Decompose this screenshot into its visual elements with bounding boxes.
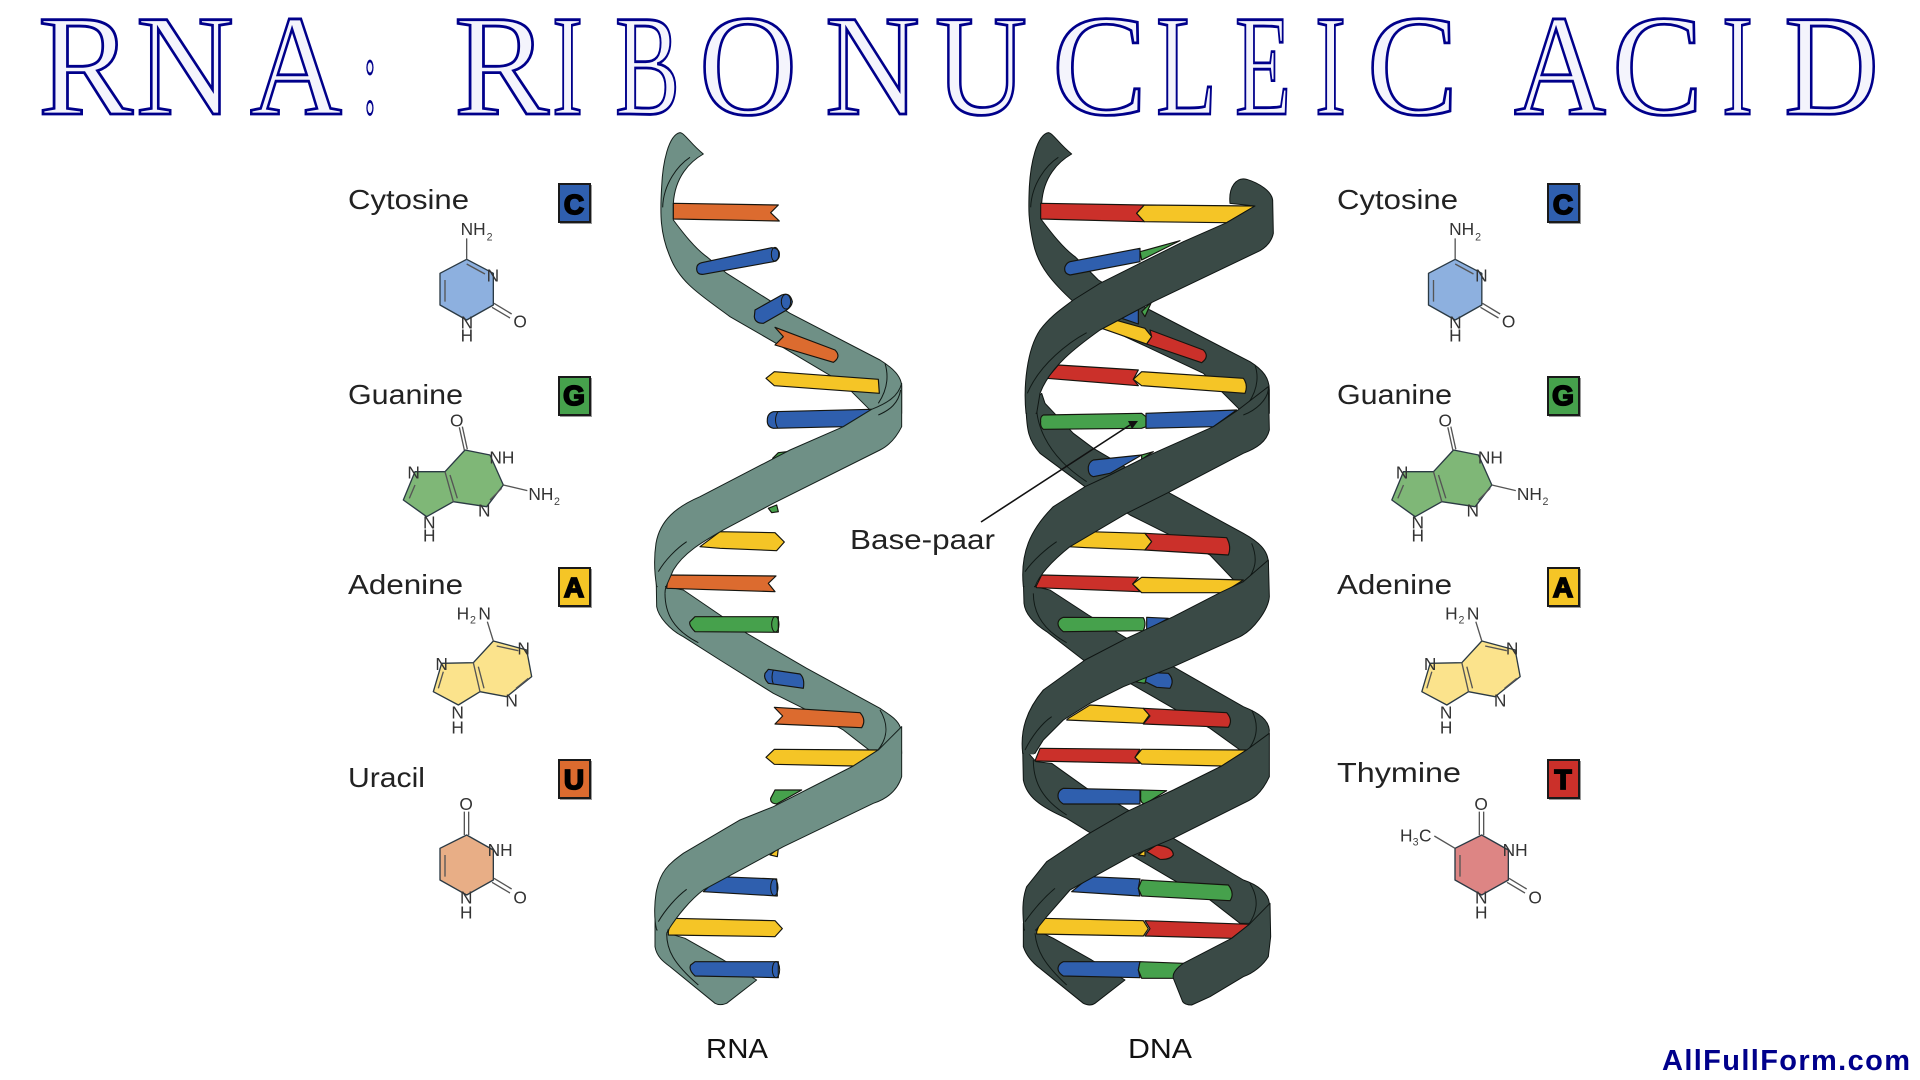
molecule: guanine: N <box>1466 501 1479 521</box>
RNA backbone: rear segments <box>655 133 902 1005</box>
molecule: adenine: N <box>478 603 491 623</box>
molecule: adenine: 2 <box>1458 614 1464 626</box>
label: Guanine: Guanine <box>1337 379 1452 410</box>
label: Guanine: Guanine <box>348 379 463 410</box>
molecule: guanine: NH <box>1478 447 1503 467</box>
label: Uracil: Uracil <box>348 762 425 793</box>
molecule: adenine <box>433 603 532 737</box>
molecule: uracil: O <box>513 887 527 907</box>
badge: C: C <box>1553 189 1573 220</box>
label: Cytosine: Cytosine <box>1337 184 1458 215</box>
DNA backbone: front segments <box>1022 179 1273 1005</box>
molecule: thymine: NH <box>1503 840 1528 860</box>
molecule: cytosine: 2 <box>487 232 493 244</box>
molecule: adenine: N <box>435 654 448 674</box>
molecule: guanine: N <box>423 512 436 532</box>
molecule: adenine: N <box>1424 654 1436 674</box>
panel: DNA bases legend <box>1337 184 1581 922</box>
badge: T: T <box>1554 764 1572 795</box>
helix: RNA <box>655 133 902 1005</box>
molecule: thymine: O <box>1528 887 1542 907</box>
badge: U <box>559 760 592 800</box>
molecule: thymine: O <box>1474 794 1488 814</box>
badge: A: A <box>1553 572 1573 603</box>
badge: A <box>1548 568 1581 608</box>
RNA backbone: front segments <box>655 383 902 933</box>
molecule: thymine: C <box>1419 826 1432 846</box>
molecule: guanine <box>403 411 560 546</box>
molecule: cytosine: 2 <box>1475 232 1481 244</box>
badge: C <box>559 184 592 224</box>
badge: A: A <box>564 572 584 603</box>
molecule: adenine: 2 <box>470 614 476 626</box>
molecule: adenine: N <box>1494 691 1506 711</box>
badge: C <box>1548 184 1581 224</box>
molecule: cytosine: N <box>461 312 473 332</box>
badge: C: C <box>564 189 584 220</box>
label: RNA: RNA <box>706 1033 768 1064</box>
molecule: guanine: H <box>1411 526 1424 546</box>
molecule: cytosine: N <box>1475 266 1488 286</box>
title <box>38 0 1879 146</box>
RNA nucleotide bases <box>667 203 879 978</box>
molecule: uracil: O <box>459 794 473 814</box>
molecule: thymine: H <box>1475 902 1488 922</box>
arrow: base-pair pointer <box>981 421 1138 522</box>
badge: A <box>559 568 592 608</box>
molecule: uracil <box>440 794 527 922</box>
badge: G <box>1548 377 1581 417</box>
badge: G: G <box>563 380 585 411</box>
molecule: guanine: N <box>478 501 491 521</box>
badge: G: G <box>1552 380 1574 411</box>
molecule: adenine: H <box>1445 603 1458 623</box>
watermark: AllFullForm.com: AllFullForm.com <box>1662 1045 1910 1077</box>
molecule: adenine: H <box>457 603 469 623</box>
molecule: cytosine: NH <box>1449 219 1474 239</box>
molecule: thymine: H <box>1400 826 1413 846</box>
molecule: adenine: N <box>505 691 518 711</box>
molecule: guanine: O <box>450 411 463 431</box>
molecule: thymine: 3 <box>1413 837 1419 849</box>
molecule: guanine: H <box>423 526 436 546</box>
badge: G <box>559 377 592 417</box>
molecule: cytosine: O <box>513 312 527 332</box>
molecule: adenine: N <box>1467 603 1479 623</box>
molecule: cytosine <box>1428 219 1515 346</box>
molecule: cytosine: O <box>1502 312 1515 332</box>
panel: RNA bases legend <box>348 184 592 922</box>
molecule: adenine: N <box>517 638 530 658</box>
molecule: uracil: H <box>460 902 473 922</box>
molecule: guanine: N <box>1411 512 1424 532</box>
molecule: guanine: N <box>407 462 420 482</box>
helix: DNA <box>1022 133 1273 1005</box>
molecule: adenine <box>1422 603 1520 737</box>
title: : <box>363 15 377 137</box>
molecule: guanine: NH <box>528 484 553 504</box>
molecule: adenine: N <box>451 702 464 722</box>
molecule: thymine <box>1400 794 1542 922</box>
molecule: guanine: NH <box>1517 484 1542 504</box>
label: Thymine: Thymine <box>1337 757 1461 788</box>
molecule: guanine: O <box>1438 411 1452 431</box>
molecule: uracil: N <box>460 887 473 907</box>
label: Adenine: Adenine <box>348 569 463 600</box>
badge: T <box>1548 760 1581 800</box>
label: Adenine: Adenine <box>1337 569 1452 600</box>
molecule: cytosine <box>440 219 527 346</box>
molecule: guanine: 2 <box>554 496 560 508</box>
molecule: guanine <box>1392 411 1548 546</box>
label: Cytosine: Cytosine <box>348 184 469 215</box>
label: DNA: DNA <box>1128 1033 1192 1064</box>
badge: U: U <box>564 764 584 795</box>
molecule: adenine: N <box>1440 702 1452 722</box>
molecule: cytosine: H <box>461 326 473 346</box>
DNA base pairs <box>1035 203 1255 978</box>
molecule: cytosine: N <box>487 266 499 286</box>
molecule: guanine: 2 <box>1542 496 1548 508</box>
molecule: cytosine: N <box>1449 312 1462 332</box>
molecule: cytosine: NH <box>461 219 486 239</box>
molecule: cytosine: H <box>1449 326 1462 346</box>
molecule: guanine: N <box>1396 462 1408 482</box>
label: Base-paar: Base-paar <box>850 524 995 555</box>
molecule: uracil: NH <box>488 840 513 860</box>
molecule: thymine: N <box>1475 887 1488 907</box>
molecule: guanine: NH <box>489 447 514 467</box>
molecule: adenine: H <box>451 717 464 737</box>
DNA backbone: rear segments <box>1023 133 1270 1005</box>
molecule: adenine: N <box>1506 638 1518 658</box>
molecule: adenine: H <box>1440 717 1452 737</box>
